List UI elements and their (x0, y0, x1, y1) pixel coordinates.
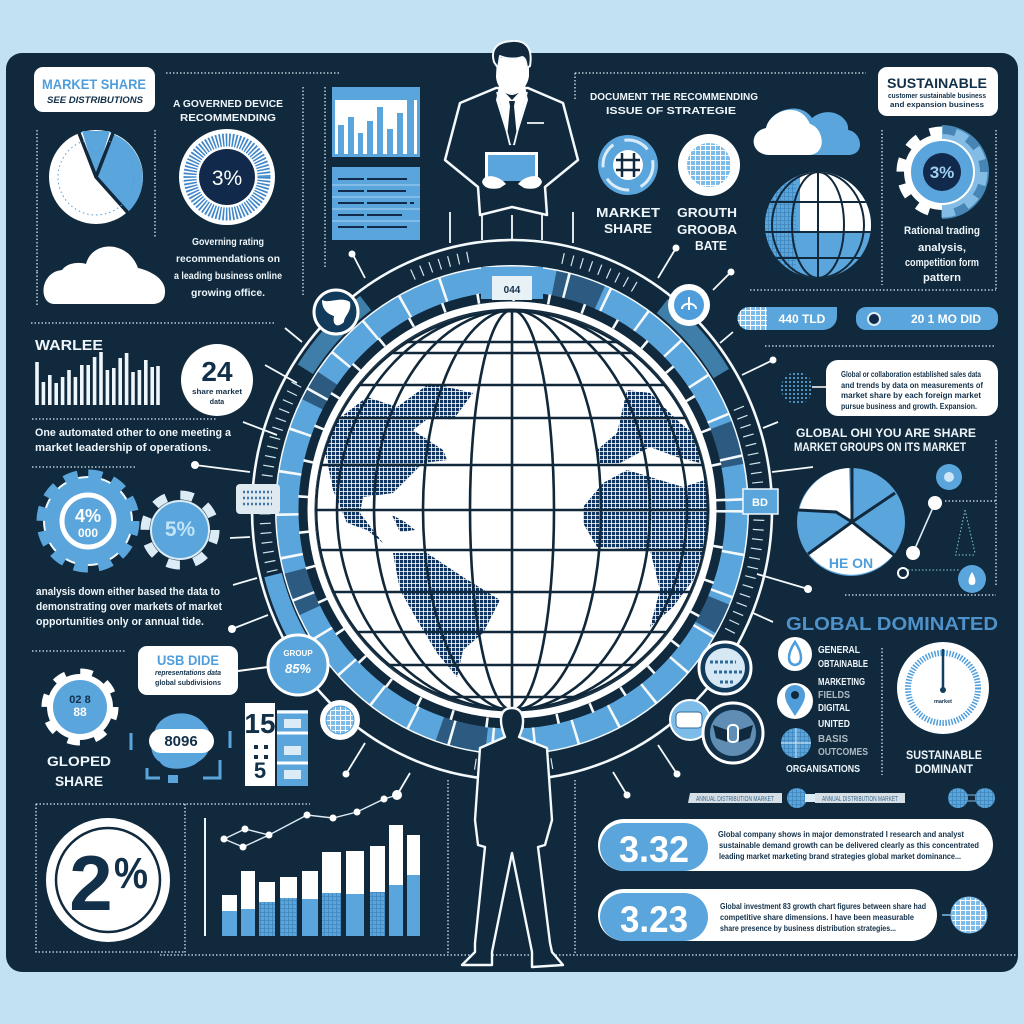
label: sustainable: and expansion business (890, 102, 984, 109)
stat pill: 3.23: competitive share dimensions. I have been measurable (720, 912, 914, 922)
text list: dominated items: GENERAL (818, 644, 860, 656)
table: 15 digits (244, 703, 308, 786)
ring: tick band (252, 240, 772, 780)
stat circle: 2%: % (114, 849, 148, 898)
heading: strategy (590, 91, 758, 117)
label: sustainable: customer sustainable business (888, 93, 986, 100)
gauge: 3%: 3% (212, 167, 242, 190)
figure: businessman top (445, 41, 578, 215)
node: icon badge top right (668, 284, 710, 326)
text list: dominated items: FIELDS (818, 689, 850, 701)
globe grid (315, 310, 709, 710)
text block: sustainable description: pattern (923, 272, 961, 284)
text list: dominated items: OBTAINABLE (818, 658, 868, 670)
node: map badge bottom right (699, 642, 751, 694)
stat pill: 3.32: Global company shows in major demonstrated I research and analyst (718, 829, 964, 839)
heading: warlee: WARLEE (35, 337, 103, 354)
text block: gears description: demonstrating over markets of market (36, 601, 222, 613)
label: usb dide (138, 646, 238, 695)
text block: sustainable description: analysis, (918, 242, 966, 254)
text: sustainable dominant (906, 748, 982, 776)
text list: dominated items: DIGITAL (818, 702, 850, 714)
text: global share: GLOPED (47, 753, 111, 769)
label: usb dide: USB DIDE (157, 652, 219, 668)
node: map badge top left (314, 290, 358, 334)
heading: pie section: MARKET GROUPS ON ITS MARKET (794, 442, 966, 454)
text list: dominated items: MARKETING (818, 676, 865, 688)
icon: blue gear 5%: 5% (165, 518, 195, 541)
table: 15 digits: 5 (254, 758, 266, 783)
text list: dominated items (786, 644, 868, 775)
pill: small stat left: 440 TLD (779, 312, 826, 326)
strip: bar with icon (688, 788, 905, 808)
text list: dominated items: OUTCOMES (818, 746, 868, 758)
stat circle: 24: data (210, 399, 224, 406)
text block: warlee description: One automated other to one meeting a (35, 427, 232, 439)
label: sustainable (878, 67, 998, 116)
table: 15 digits: 15 (244, 708, 276, 739)
node: group badge (238, 635, 328, 695)
text list: dominated items: ORGANISATIONS (786, 763, 860, 775)
pill: small stat right (856, 307, 998, 330)
stat pill: 3.32: leading market marketing brand strategies global market dominance... (719, 851, 961, 861)
text: sustainable dominant: SUSTAINABLE (906, 748, 982, 762)
connector lines: top figure legs (450, 212, 573, 243)
stat circle: 2%: 2 (69, 839, 113, 927)
label: market share: MARKET SHARE (42, 76, 146, 92)
icon: blue gear 5% (145, 495, 215, 565)
node: dark badge bottom right (703, 703, 763, 763)
line chart (220, 790, 402, 850)
stat circle: 24 (181, 344, 253, 416)
heading: strategy: ISSUE OF STRATEGIE (606, 105, 736, 117)
icon: blue gear 4% (41, 474, 135, 568)
text block: gauge description (174, 236, 282, 299)
label: market share: SEE DISTRIBUTIONS (47, 95, 143, 105)
callout: description (826, 360, 998, 416)
figure: businessman bottom (462, 708, 563, 967)
stat pill: 3.23: 3.23 (620, 899, 688, 940)
gauge: clock dial: market (934, 699, 952, 705)
text list: dominated items: BASIS (818, 733, 848, 745)
continents: dotted map (322, 383, 712, 677)
text: growth regional base: GROOBA (677, 223, 737, 237)
icon: dotted sphere (781, 372, 828, 404)
text block: sustainable description: competition form (905, 257, 979, 269)
icon: location pin badge (777, 683, 813, 719)
bar chart: bottom stacked (205, 818, 420, 936)
bar chart: white spikes (37, 352, 158, 405)
icon: blue gear 4%: 4% (75, 506, 101, 526)
icon: dumbbell (948, 788, 995, 808)
text: sustainable dominant: DOMINANT (915, 762, 974, 776)
bar chart: top blue (332, 87, 420, 157)
icon: grid sphere (942, 897, 987, 933)
pie chart: right (797, 467, 905, 576)
icon: gear 3% (901, 125, 989, 219)
strip: bar with icon: ANNUAL DISTRIBUTION MARKET (822, 796, 898, 803)
gauge: 3% (179, 129, 275, 225)
strip: bar with icon: ANNUAL DISTRIBUTION MARKET (696, 796, 775, 803)
pill: small stat left (738, 307, 837, 330)
heading: gauge (173, 98, 283, 124)
label: usb dide: global subdivisions (155, 680, 221, 687)
globe ring (252, 240, 772, 780)
text: market share label: MARKET (596, 206, 660, 220)
icon: white gear global share: 02 8 (69, 694, 91, 706)
stat pill: 3.23: Global investment 83 growth chart figures between share had (720, 901, 926, 911)
node: small white badge bottom left (320, 700, 360, 740)
tag: right of ring: BD (752, 497, 768, 509)
text block: gears description: analysis down either based the data to (36, 586, 220, 598)
heading: gauge: A GOVERNED DEVICE (173, 98, 283, 110)
text: growth regional base: BATE (695, 239, 727, 253)
text: market share label (596, 206, 660, 236)
node: group badge: GROUP (283, 649, 313, 658)
stat pill: 3.23 (598, 889, 937, 941)
icon: white gear global share: 88 (73, 705, 87, 719)
callout: description: Global or collaboration established sales data (841, 370, 981, 379)
text block: warlee description (35, 427, 232, 454)
text block: sustainable description: Rational trading (904, 225, 980, 237)
table: blue rows (332, 167, 420, 240)
label: usb dide: representations data (155, 670, 221, 677)
gauge: clock dial (897, 642, 989, 734)
icon: cloud left (44, 246, 165, 304)
stat pill: 3.32: sustainable demand growth can be delivered clearly as this concentrated (719, 840, 979, 850)
text: growth regional base (677, 206, 737, 253)
node: group badge: 85% (285, 661, 311, 676)
text block: gauge description: recommendations on (176, 253, 280, 265)
text block: warlee description: market leadership of operations. (35, 442, 211, 454)
icon: gear 3%: 3% (930, 163, 954, 182)
text list: dominated items: UNITED (818, 718, 850, 730)
connector node dots (191, 244, 812, 798)
text: growth regional base: GROUTH (677, 206, 737, 220)
stat circle: 24: share market (192, 389, 243, 396)
heading: pie section: GLOBAL OHI YOU ARE SHARE (796, 428, 976, 440)
text block: sustainable description (904, 225, 980, 284)
stat circle: 2% (46, 818, 170, 942)
text: market share label: SHARE (604, 222, 652, 236)
icon: cloud right (754, 109, 860, 155)
icon: white grid circle (678, 134, 740, 196)
globe (315, 310, 712, 710)
tag: top of ring (481, 267, 543, 300)
node: light badge bottom right (670, 700, 710, 740)
icon: drop badge (778, 637, 812, 671)
heading: global dominated: GLOBAL DOMINATED (786, 614, 998, 634)
stat pill: 3.23: share presence by business distribution strategies... (720, 923, 896, 933)
pie chart: right: HE ON (829, 555, 873, 571)
icon: blue gear 4%: 000 (78, 526, 98, 540)
text: global share (47, 753, 111, 789)
text block: gears description (36, 586, 222, 628)
pie chart: market share (49, 130, 143, 224)
icon: blue blob 8096 (131, 713, 230, 783)
text block: gauge description: Governing rating (192, 236, 264, 248)
icon: globe badge (781, 728, 811, 758)
pill: small stat right: 20 1 MO DID (911, 312, 981, 326)
connector spokes around ring (195, 248, 813, 795)
icon: blue blob 8096: 8096 (164, 733, 198, 750)
heading: gauge: RECOMMENDING (180, 112, 276, 124)
icon: blue grid globe (765, 172, 875, 280)
heading: strategy: DOCUMENT THE RECOMMENDING (590, 91, 758, 103)
text block: gauge description: a leading business online (174, 270, 282, 282)
callout: description: market share by each foreign market (841, 391, 981, 400)
label: market share (34, 67, 155, 112)
icon: blue dial (598, 135, 658, 195)
text: global share: SHARE (55, 773, 103, 789)
stat pill: 3.32: 3.32 (619, 829, 689, 870)
label: sustainable: SUSTAINABLE (887, 75, 987, 91)
node chart: right of pie (898, 464, 986, 593)
text block: gears description: opportunities only or annual tide. (36, 616, 204, 628)
tag: right of ring (743, 489, 778, 514)
heading: pie section (794, 428, 976, 454)
text block: gauge description: growing office. (191, 287, 265, 299)
callout: description: pursue business and growth. Expansion. (841, 402, 977, 411)
icon: white gear global share (46, 673, 114, 741)
tag: top of ring: 044 (504, 285, 521, 296)
tag: left of ring (236, 484, 280, 514)
stat circle: 24: 24 (201, 356, 233, 387)
ring: blue segments (289, 279, 735, 741)
stat pill: 3.32 (598, 819, 993, 871)
callout: description: and trends by data on measurements of (841, 381, 983, 390)
